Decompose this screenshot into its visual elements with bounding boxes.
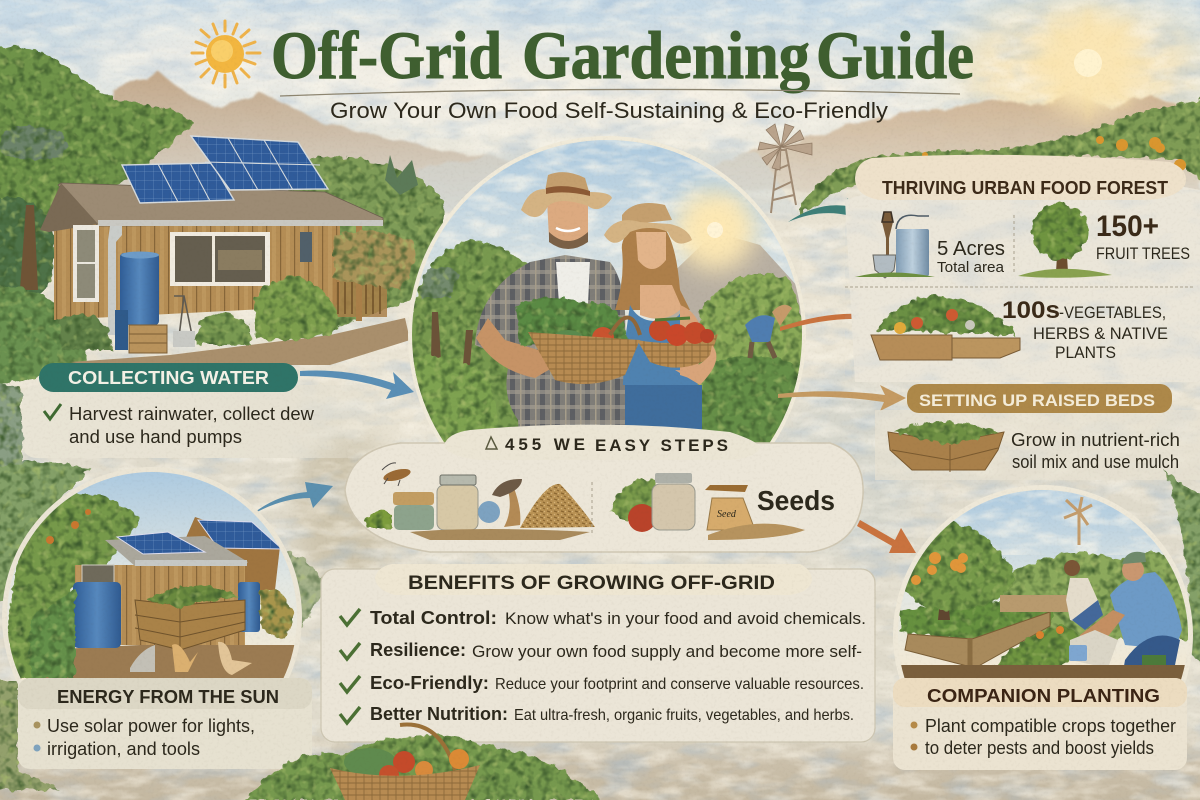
arrow: seeds to companion planting bbox=[857, 520, 916, 553]
blue barrel bbox=[73, 582, 121, 648]
raised bed wood bbox=[905, 612, 1050, 668]
icon: compost pile bbox=[520, 484, 595, 528]
arrow: water to couple bbox=[300, 371, 414, 399]
benefit: resilience bbox=[340, 640, 862, 661]
bullets bbox=[910, 716, 1176, 758]
circle: companion planting bbox=[893, 485, 1193, 683]
panel: benefits of growing off-grid bbox=[321, 564, 875, 742]
benefit: eco-friendly: Eco-Friendly: bbox=[370, 673, 489, 693]
panel: energy from the sun bbox=[18, 678, 312, 769]
collecting water heading pill bbox=[39, 363, 298, 392]
heading bbox=[18, 678, 312, 709]
background gardener bbox=[745, 305, 792, 358]
right hillside foliage bbox=[800, 95, 1200, 215]
large window bbox=[170, 232, 270, 286]
ground bbox=[40, 645, 300, 680]
left lower foliage bbox=[0, 380, 1200, 790]
right sun glow bbox=[1030, 10, 1150, 120]
icon: grain jar bbox=[437, 475, 478, 530]
heading: BENEFITS OF GROWING OFF-GRID bbox=[408, 573, 775, 594]
heading bbox=[855, 155, 1186, 200]
hand pump bbox=[174, 296, 194, 345]
stat: 100s vegetables: HERBS & NATIVE bbox=[1033, 324, 1168, 343]
icon: check bbox=[44, 404, 61, 419]
circle: energy from the sun bbox=[2, 467, 302, 684]
arrow: energy to steps bbox=[250, 482, 333, 516]
tree bbox=[8, 493, 140, 680]
icon: herb jar bbox=[365, 492, 434, 530]
door window bbox=[300, 232, 312, 262]
woman bbox=[604, 203, 699, 385]
heading bbox=[893, 678, 1187, 707]
windmill small bbox=[1064, 497, 1092, 545]
man bbox=[475, 172, 626, 426]
icon: vegetable beds bbox=[871, 296, 1020, 360]
heading: ENERGY FROM THE SUN bbox=[57, 687, 279, 707]
stat: 150+ fruit trees bbox=[1096, 210, 1190, 263]
bullets: to deter pests and boost yields bbox=[925, 738, 1154, 758]
arrow: tan to raised beds bbox=[778, 385, 906, 411]
central circle: gardening couple bbox=[408, 136, 806, 442]
benefit: better nutrition bbox=[340, 704, 854, 724]
icon: herbs and tomato bbox=[610, 479, 656, 532]
solar panels upper bbox=[191, 136, 328, 190]
flower bed bbox=[994, 624, 1079, 665]
ground path bbox=[70, 318, 410, 365]
icon: seed jar bbox=[652, 473, 695, 530]
icon: water can bbox=[855, 215, 935, 277]
front shed bbox=[75, 565, 245, 645]
raised compost box bbox=[135, 600, 245, 650]
heading: COMPANION PLANTING bbox=[927, 686, 1160, 706]
woman basket with tomatoes bbox=[637, 318, 718, 385]
bottom vegetable basket with plants bbox=[245, 725, 600, 800]
benefit: resilience: Resilience: bbox=[370, 640, 466, 660]
distant mountains bbox=[664, 239, 802, 330]
collecting water text: and use hand pumps bbox=[69, 427, 242, 447]
icon: seed bag: Seed bbox=[717, 509, 737, 520]
raised bed foliage bbox=[900, 601, 1055, 642]
porch shrubs bbox=[334, 231, 414, 290]
stat: 5 acres: Total area bbox=[937, 259, 1005, 276]
heading: THRIVING URBAN FOOD FOREST bbox=[882, 178, 1168, 198]
title: Guide bbox=[816, 17, 974, 93]
arrow: teal to food forest bbox=[788, 198, 867, 226]
benefit: total control: Total Control: bbox=[370, 608, 497, 628]
benefit: total control bbox=[340, 608, 866, 628]
benefit: better nutrition: Better Nutrition: bbox=[370, 704, 508, 724]
title bbox=[271, 17, 974, 93]
shrub bbox=[254, 276, 338, 340]
benefit: eco-friendly bbox=[340, 673, 864, 693]
heading bbox=[907, 384, 1172, 413]
downspout bbox=[108, 226, 122, 335]
bullets: Plant compatible crops together bbox=[925, 716, 1176, 736]
benefit: eco-friendly: Reduce your footprint and conserve valuable resources. bbox=[495, 676, 864, 693]
icon: seed bag bbox=[705, 485, 755, 530]
pebbles bbox=[410, 529, 590, 540]
subtitle: Grow Your Own Food Self-Sustaining & Eco-Friendly bbox=[330, 98, 888, 123]
panel: thriving urban food forest bbox=[845, 155, 1200, 382]
icon: fruit tree bbox=[1018, 204, 1112, 278]
stat: 5 acres: 5 Acres bbox=[937, 238, 1005, 260]
man basket with greens bbox=[516, 298, 640, 384]
panel: collecting water bbox=[22, 363, 392, 458]
benefit: better nutrition: Eat ultra-fresh, organic fruits, vegetables, and herbs. bbox=[514, 707, 854, 724]
bullets bbox=[34, 716, 255, 759]
left forest behind the cabin bbox=[280, 155, 446, 330]
title: Gardening bbox=[522, 17, 810, 93]
bullets: Use solar power for lights, bbox=[47, 716, 255, 736]
cabin roof bbox=[58, 183, 383, 226]
heading: SETTING UP RAISED BEDS bbox=[919, 391, 1155, 410]
orchard left bbox=[412, 239, 528, 442]
heading bbox=[375, 564, 812, 595]
raised beds text: Grow in nutrient-rich bbox=[1011, 430, 1180, 450]
chickens bbox=[130, 645, 155, 672]
stat: 100s vegetables: PLANTS bbox=[1055, 343, 1116, 362]
stat: 100s vegetables: -VEGETABLES, bbox=[1059, 303, 1166, 322]
collecting water text: Harvest rainwater, collect dew bbox=[69, 404, 315, 424]
raised beds text: soil mix and use mulch bbox=[1012, 452, 1179, 472]
porch bbox=[356, 226, 362, 321]
orange tree bbox=[938, 609, 950, 620]
collecting water heading pill: COLLECTING WATER bbox=[68, 368, 269, 388]
stat: 100s vegetables: 100s bbox=[1002, 297, 1060, 324]
woman gardening bbox=[1064, 560, 1103, 630]
bullets: irrigation, and tools bbox=[47, 739, 200, 759]
panel: setting up raised beds bbox=[875, 384, 1200, 480]
cabin with solar panels and rain barrel bbox=[40, 136, 414, 365]
man gardening bbox=[1069, 552, 1182, 665]
back shed bbox=[185, 517, 280, 590]
distant trees bbox=[1000, 551, 1195, 640]
beans bbox=[708, 524, 805, 540]
wooden crate bbox=[129, 325, 167, 353]
title: Off-Grid bbox=[271, 17, 502, 93]
steps heading: EASY STEPS bbox=[595, 436, 728, 455]
icon: mushroom and ball bbox=[478, 479, 522, 527]
icon: raised bed bbox=[888, 422, 1004, 472]
rain barrel bbox=[120, 253, 159, 325]
seeds label: Seeds bbox=[757, 485, 835, 516]
steps heading: 455 WE bbox=[505, 435, 585, 454]
mountains: distant ranges bbox=[100, 70, 1200, 220]
side window bbox=[73, 225, 99, 302]
benefit: resilience: Grow your own food supply and become more self- bbox=[472, 642, 862, 661]
solar panels lower bbox=[122, 163, 234, 203]
stat: 150+ fruit trees: 150+ bbox=[1096, 210, 1159, 243]
panel: easy steps bbox=[345, 424, 863, 552]
benefit: total control: Know what's in your food and avoid chemicals. bbox=[505, 609, 866, 628]
stat: 100s vegetables bbox=[1002, 297, 1168, 362]
raised beds text bbox=[1011, 430, 1180, 472]
stat: 5 acres bbox=[937, 238, 1005, 276]
steps heading bbox=[444, 424, 760, 460]
icon: shovel bbox=[873, 212, 896, 278]
windmill bbox=[758, 124, 812, 213]
panel: companion planting bbox=[893, 678, 1187, 770]
collecting water text bbox=[69, 404, 315, 447]
left tree bbox=[0, 46, 195, 470]
sun icon bbox=[192, 21, 260, 87]
sun glow bbox=[675, 190, 755, 270]
icon: insect bbox=[382, 463, 412, 486]
orchard right bbox=[698, 272, 802, 442]
cabin walls bbox=[54, 190, 340, 320]
arrow: orange to vegetables bbox=[780, 299, 878, 331]
